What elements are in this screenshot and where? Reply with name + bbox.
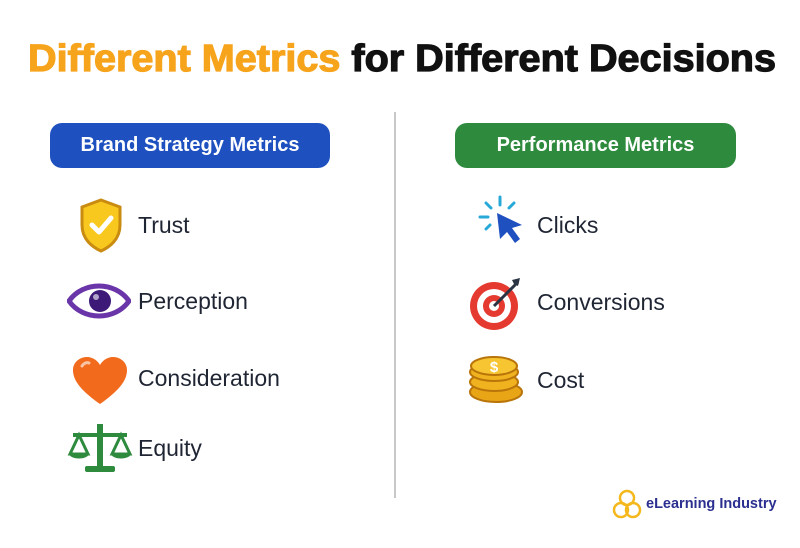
icon: coins: $ [490,359,499,376]
item: Clicks: Clicks [537,212,598,238]
icon: heart [73,357,127,404]
icon: coins [469,356,523,403]
item: Consideration [73,357,280,404]
item: Perception: Perception [138,288,248,314]
item: Clicks [478,196,598,243]
item: Consideration: Consideration [138,365,280,391]
item: Conversions [470,278,665,330]
pill: Performance Metrics: Performance Metrics [497,134,694,156]
item: Cost [469,356,584,403]
icon: shield [80,198,122,253]
icon: cursor click [478,196,522,243]
icon: target [470,278,520,330]
logo: eLearning Industry: eLearning Industry [646,496,777,512]
icon: eye [67,284,131,318]
item: Trust [80,198,190,253]
item: Cost: Cost [537,367,584,393]
item: Equity [68,424,202,472]
pill: Brand Strategy Metrics [50,123,330,168]
pill: Performance Metrics [455,123,736,168]
item: Equity: Equity [138,435,202,461]
logo: eLearning Industry [612,490,777,518]
icon: scales [68,424,132,472]
item: Conversions: Conversions [537,289,665,315]
item: Perception [67,284,248,318]
title: Different Metrics for Different Decisions [28,38,776,80]
item: Trust: Trust [138,212,190,238]
icon: logo mark [612,490,642,518]
pill: Brand Strategy Metrics: Brand Strategy Metrics [81,134,299,156]
